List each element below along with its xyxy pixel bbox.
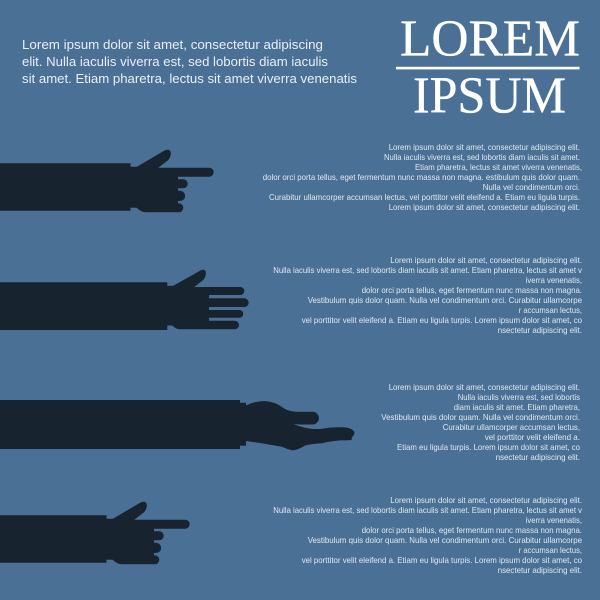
title: Lorem Ipsum xyxy=(396,11,580,125)
text block 2: r accumsan lectus, xyxy=(519,305,582,315)
text block 2: Lorem ipsum dolor sit amet, consectetur adipiscing elit. xyxy=(390,255,582,265)
text block 3: vel porttitor velit eleifend a. xyxy=(485,432,580,442)
text block 1 xyxy=(263,142,582,212)
text block 1: Lorem ipsum dolor sit amet, consectetur adipiscing elit. xyxy=(389,202,580,212)
title: Lorem Ipsum: LOREM xyxy=(400,11,580,68)
text block 4: nsectetur adipiscing elit. xyxy=(498,565,582,575)
icon: arm with pointing hand 1 xyxy=(0,150,214,212)
text block 3 xyxy=(381,382,580,462)
text block 3: Curabitur ullamcorper accumsan lectus, xyxy=(443,422,580,432)
text block 1: Curabitur ullamcorper accumsan lectus, vel porttitor velit eleifend a. Etiam eu ligula turpis. xyxy=(269,192,580,202)
text block 1: Nulla iaculis viverra est, sed lobortis diam iaculis sit amet. xyxy=(384,152,580,162)
intro text block: elit. Nulla iaculis viverra est, sed lobortis diam iaculis xyxy=(22,54,328,69)
text block 4: Lorem ipsum dolor sit amet, consectetur adipiscing elit. xyxy=(390,495,582,505)
text block 1: Lorem ipsum dolor sit amet, consectetur adipiscing elit. xyxy=(389,142,580,152)
text block 2: dolor orci porta tellus, eget fermentum nunc massa non magna. xyxy=(362,285,582,295)
text block 4: Nulla iaculis viverra est, sed lobortis diam iaculis sit amet. Etiam pharetra, lectus sit amet v xyxy=(273,505,583,515)
icon: arm with palm-up hand xyxy=(0,400,354,450)
text block 1: dolor orci porta tellus, eget fermentum nunc massa non magna. estibulum quis dolor quam. xyxy=(263,172,580,182)
text block 3: Vestibulum quis dolor quam. Nulla vel condimentum orci. xyxy=(381,412,580,422)
title: Lorem Ipsum: IPSUM xyxy=(413,68,566,125)
text block 4: r accumsan lectus, xyxy=(519,545,582,555)
intro text block: sit amet. Etiam pharetra, lectus sit amet viverra venenatis xyxy=(22,71,358,86)
text block 4 xyxy=(273,495,583,575)
icon: arm with open hand xyxy=(0,270,249,330)
text block 3: Lorem ipsum dolor sit amet, consectetur adipiscing elit. xyxy=(389,382,580,392)
text block 2: Vestibulum quis dolor quam. Nulla vel condimentum orci. Curabitur ullamcorpe xyxy=(308,295,582,305)
text block 4: Vestibulum quis dolor quam. Nulla vel condimentum orci. Curabitur ullamcorpe xyxy=(308,535,582,545)
text block 2: Nulla iaculis viverra est, sed lobortis diam iaculis sit amet. Etiam pharetra, lectus sit amet v xyxy=(273,265,583,275)
text block 2: vel porttitor velit eleifend a. Etiam eu ligula turpis. Lorem ipsum dolor sit amet, co xyxy=(302,315,582,325)
text block 4: iverra venenatis, xyxy=(526,515,582,525)
icon: arm with pointing hand 2 xyxy=(0,502,190,564)
text block 4: dolor orci porta tellus, eget fermentum nunc massa non magna. xyxy=(362,525,582,535)
intro text block xyxy=(22,37,358,86)
text block 3: diam iaculis sit amet. Etiam pharetra, xyxy=(454,402,580,412)
text block 2: nsectetur adipiscing elit. xyxy=(498,325,582,335)
text block 3: Nulla iaculis viverra est, sed lobortis xyxy=(458,392,580,402)
text block 3: nsectetur adipiscing elit. xyxy=(496,452,580,462)
text block 2 xyxy=(273,255,583,335)
text block 1: Nulla vel condimentum orci. xyxy=(483,182,580,192)
intro text block: Lorem ipsum dolor sit amet, consectetur adipiscing xyxy=(22,37,323,52)
text block 4: vel porttitor velit eleifend a. Etiam eu ligula turpis. Lorem ipsum dolor sit amet, co xyxy=(302,555,582,565)
text block 1: Etiam pharetra, lectus sit amet viverra venenatis, xyxy=(415,162,582,172)
text block 3: Etiam eu ligula turpis. Lorem ipsum dolor sit amet, co xyxy=(397,442,580,452)
text block 2: iverra venenatis, xyxy=(526,275,582,285)
